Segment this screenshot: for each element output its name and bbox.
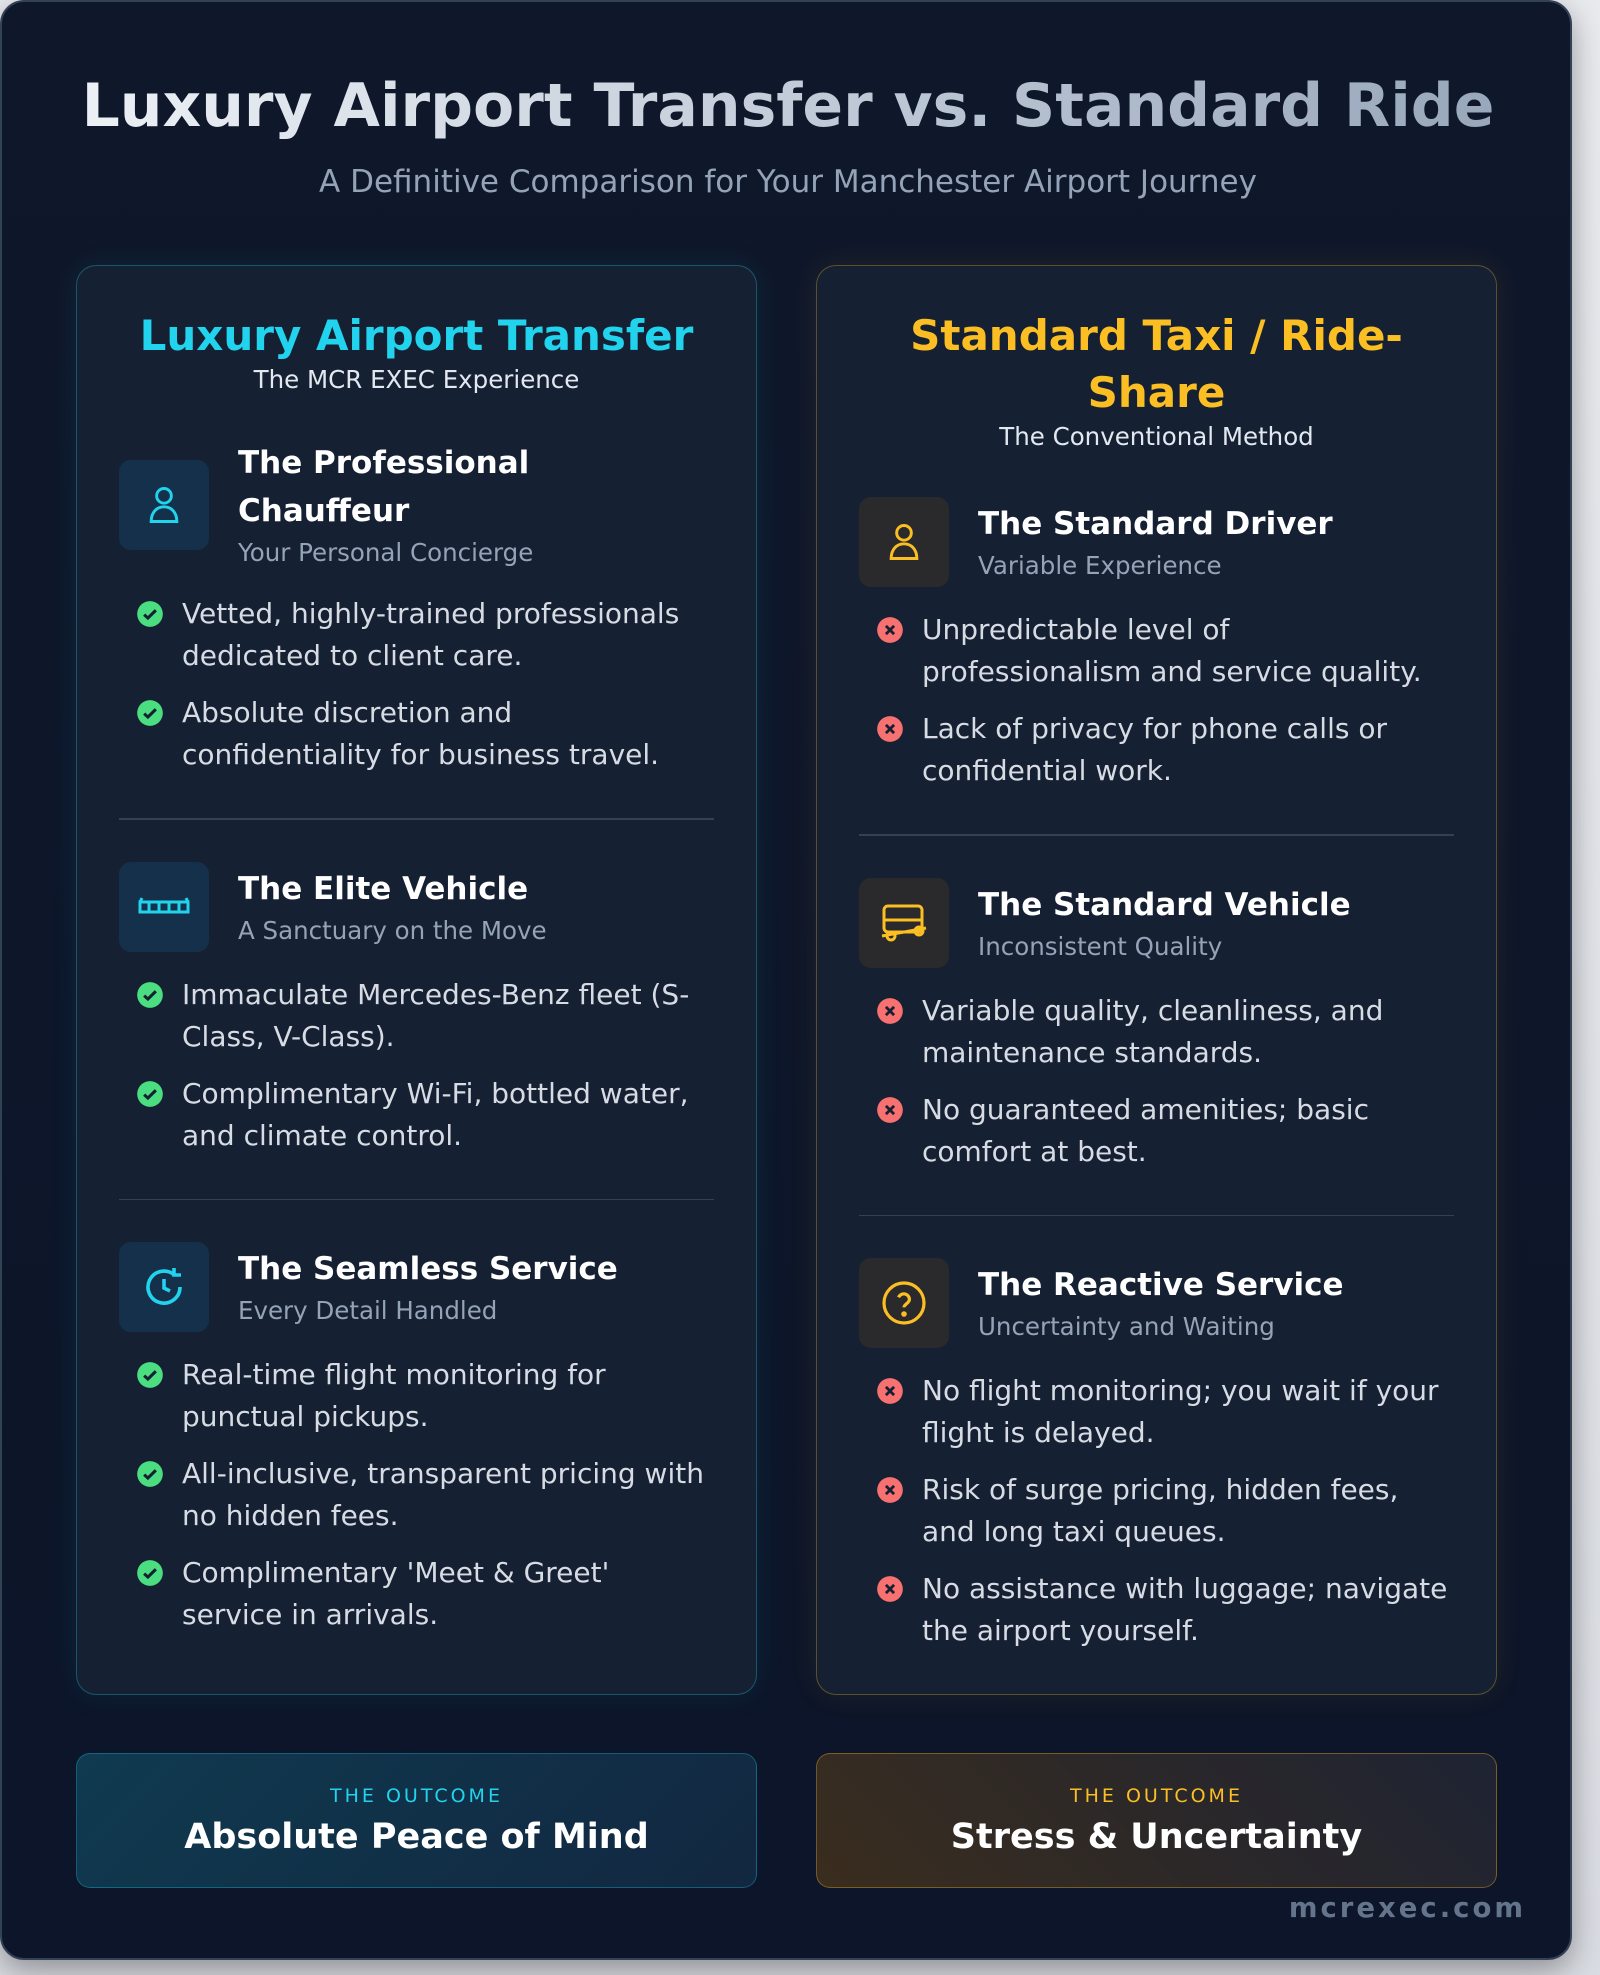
section: professional chauffeur: Vetted, highly-trained professionals dedicated to client care.: [182, 597, 679, 672]
section: seamless service: [119, 1242, 704, 1631]
panel: luxury transfer: [76, 265, 757, 1695]
panel title: luxury: Luxury Airport Transfer: [140, 311, 693, 360]
outcome: luxury: THE OUTCOME: [330, 1785, 503, 1807]
section: elite vehicle: Complimentary Wi-Fi, bottled water, and climate control.: [182, 1076, 688, 1152]
section: standard driver: The Standard Driver: [978, 506, 1333, 542]
section: standard driver: Unpredictable level of professionalism and service quality.: [922, 613, 1422, 688]
section: reactive service: Uncertainty and Waiting: [978, 1312, 1275, 1341]
section: reactive service: Risk of surge pricing, hidden fees, and long taxi queues.: [922, 1473, 1398, 1548]
section: standard driver: [859, 497, 1422, 787]
icon: question: [859, 1258, 949, 1348]
section: standard driver: Lack of privacy for phone calls or confidential work.: [922, 712, 1387, 787]
section: professional chauffeur: Your Personal Concierge: [238, 538, 533, 567]
panel: standard taxi: [816, 265, 1497, 1695]
section: seamless service: Real-time flight monitoring for punctual pickups.: [182, 1358, 606, 1433]
brand: mcrexec.com: [1289, 1892, 1526, 1924]
section: reactive service: No flight monitoring; you wait if your flight is delayed.: [922, 1374, 1439, 1449]
section: standard driver: Variable Experience: [978, 551, 1222, 580]
panel title: standard: Share: [1088, 368, 1225, 417]
section: reactive service: The Reactive Service: [978, 1267, 1344, 1303]
section: elite vehicle: [119, 862, 689, 1152]
icon: limousine: [119, 862, 209, 952]
panel subtitle: standard: The Conventional Method: [999, 422, 1314, 451]
section: standard vehicle: The Standard Vehicle: [978, 886, 1351, 922]
section: reactive service: No assistance with luggage; navigate the airport yourself.: [922, 1572, 1447, 1647]
section: standard vehicle: [859, 878, 1383, 1168]
panel title: standard: [910, 311, 1403, 417]
section: elite vehicle: A Sanctuary on the Move: [238, 916, 547, 944]
section: seamless service: The Seamless Service: [238, 1251, 618, 1287]
section: elite vehicle: Immaculate Mercedes-Benz fleet (S-Class, V-Class).: [182, 978, 689, 1052]
section: professional chauffeur: Chauffeur: [238, 493, 409, 529]
panel title: standard: Standard Taxi / Ride-: [910, 311, 1403, 360]
section: professional chauffeur: The Professional: [238, 445, 529, 481]
outcome: standard: Stress & Uncertainty: [951, 1817, 1362, 1857]
outcome: luxury: [76, 1753, 757, 1888]
icon: person: [119, 460, 209, 550]
icon: car: [859, 878, 949, 968]
section: standard vehicle: No guaranteed amenities; basic comfort at best.: [922, 1092, 1369, 1168]
icon: clock: [119, 1242, 209, 1332]
section: professional chauffeur: [119, 445, 679, 771]
section: elite vehicle: The Elite Vehicle: [238, 870, 528, 906]
subtitle: A Definitive Comparison for Your Manchester Airport Journey: [319, 164, 1257, 200]
outcome: standard: [816, 1753, 1497, 1888]
section: seamless service: All-inclusive, transparent pricing with no hidden fees.: [182, 1457, 704, 1532]
panel subtitle: luxury: The MCR EXEC Experience: [254, 365, 579, 394]
section: standard vehicle: Inconsistent Quality: [978, 932, 1222, 960]
section: professional chauffeur: Absolute discretion and confidentiality for business travel.: [182, 696, 659, 771]
icon: person amber: [859, 497, 949, 587]
outcome: luxury: Absolute Peace of Mind: [184, 1817, 649, 1857]
section: seamless service: Complimentary 'Meet & Greet' service in arrivals.: [182, 1556, 609, 1631]
section: seamless service: Every Detail Handled: [238, 1296, 497, 1325]
section: reactive service: [859, 1258, 1447, 1647]
title: Luxury Airport Transfer vs. Standard Ride: [82, 71, 1494, 141]
outcome: standard: THE OUTCOME: [1070, 1785, 1243, 1807]
section: standard vehicle: Variable quality, cleanliness, and maintenance standards.: [922, 994, 1383, 1068]
